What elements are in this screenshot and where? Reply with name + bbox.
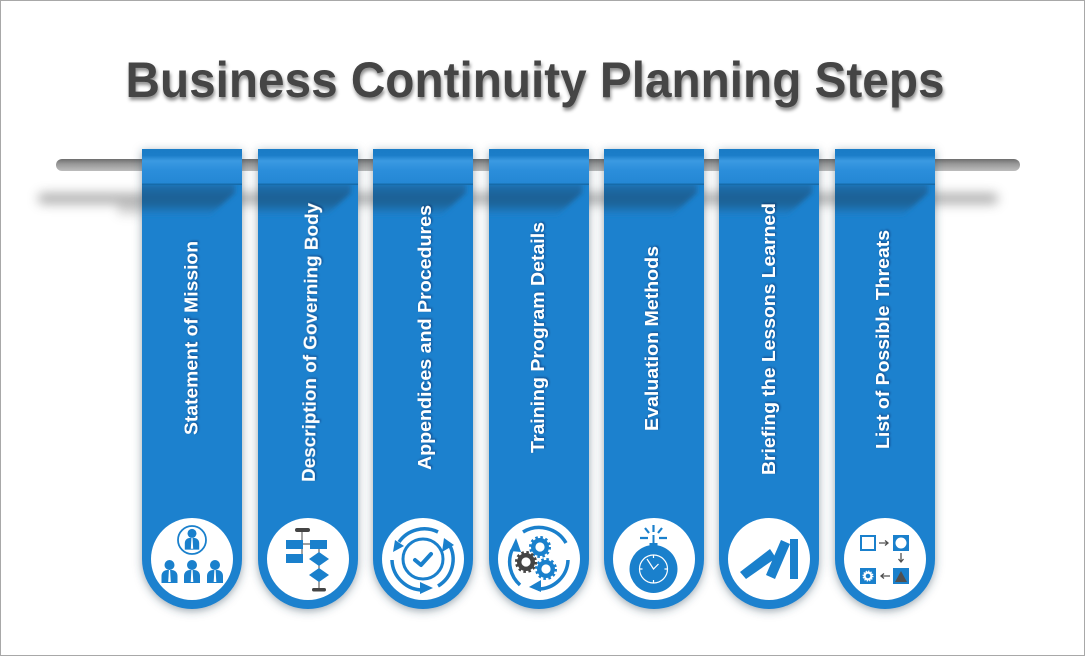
ribbon 2: Description of Governing Body [246, 149, 358, 609]
label: Evaluation Methods [642, 246, 662, 431]
label: Appendices and Procedures [415, 205, 435, 470]
icon disc: clock bomb [613, 518, 695, 600]
ribbon 7: List of Possible Threats [823, 149, 935, 609]
icon disc: cycle check [382, 518, 464, 600]
icon disc: people hierarchy [151, 518, 233, 600]
title: Business Continuity Planning Steps [126, 52, 944, 108]
label: Briefing the Lessons Learned [759, 203, 779, 475]
ribbon 1: Statement of Mission [130, 149, 242, 609]
label: Training Program Details [528, 222, 548, 453]
label: Statement of Mission [182, 241, 202, 435]
icon disc: flowchart [267, 518, 349, 600]
ribbon 4: Training Program Details [477, 149, 589, 609]
label: List of Possible Threats [873, 230, 893, 449]
ribbon 6: Briefing the Lessons Learned [707, 149, 819, 609]
hanging rod [56, 159, 1020, 171]
ribbon 5: Evaluation Methods [592, 149, 704, 609]
label: Description of Governing Body [299, 203, 322, 482]
icon disc: process diagram [844, 518, 926, 600]
icon disc: gears cycle [498, 518, 580, 600]
ribbon 3: Appendices and Procedures [361, 149, 473, 609]
rod shadow [38, 193, 998, 214]
icon disc: falling dominoes [728, 518, 810, 600]
